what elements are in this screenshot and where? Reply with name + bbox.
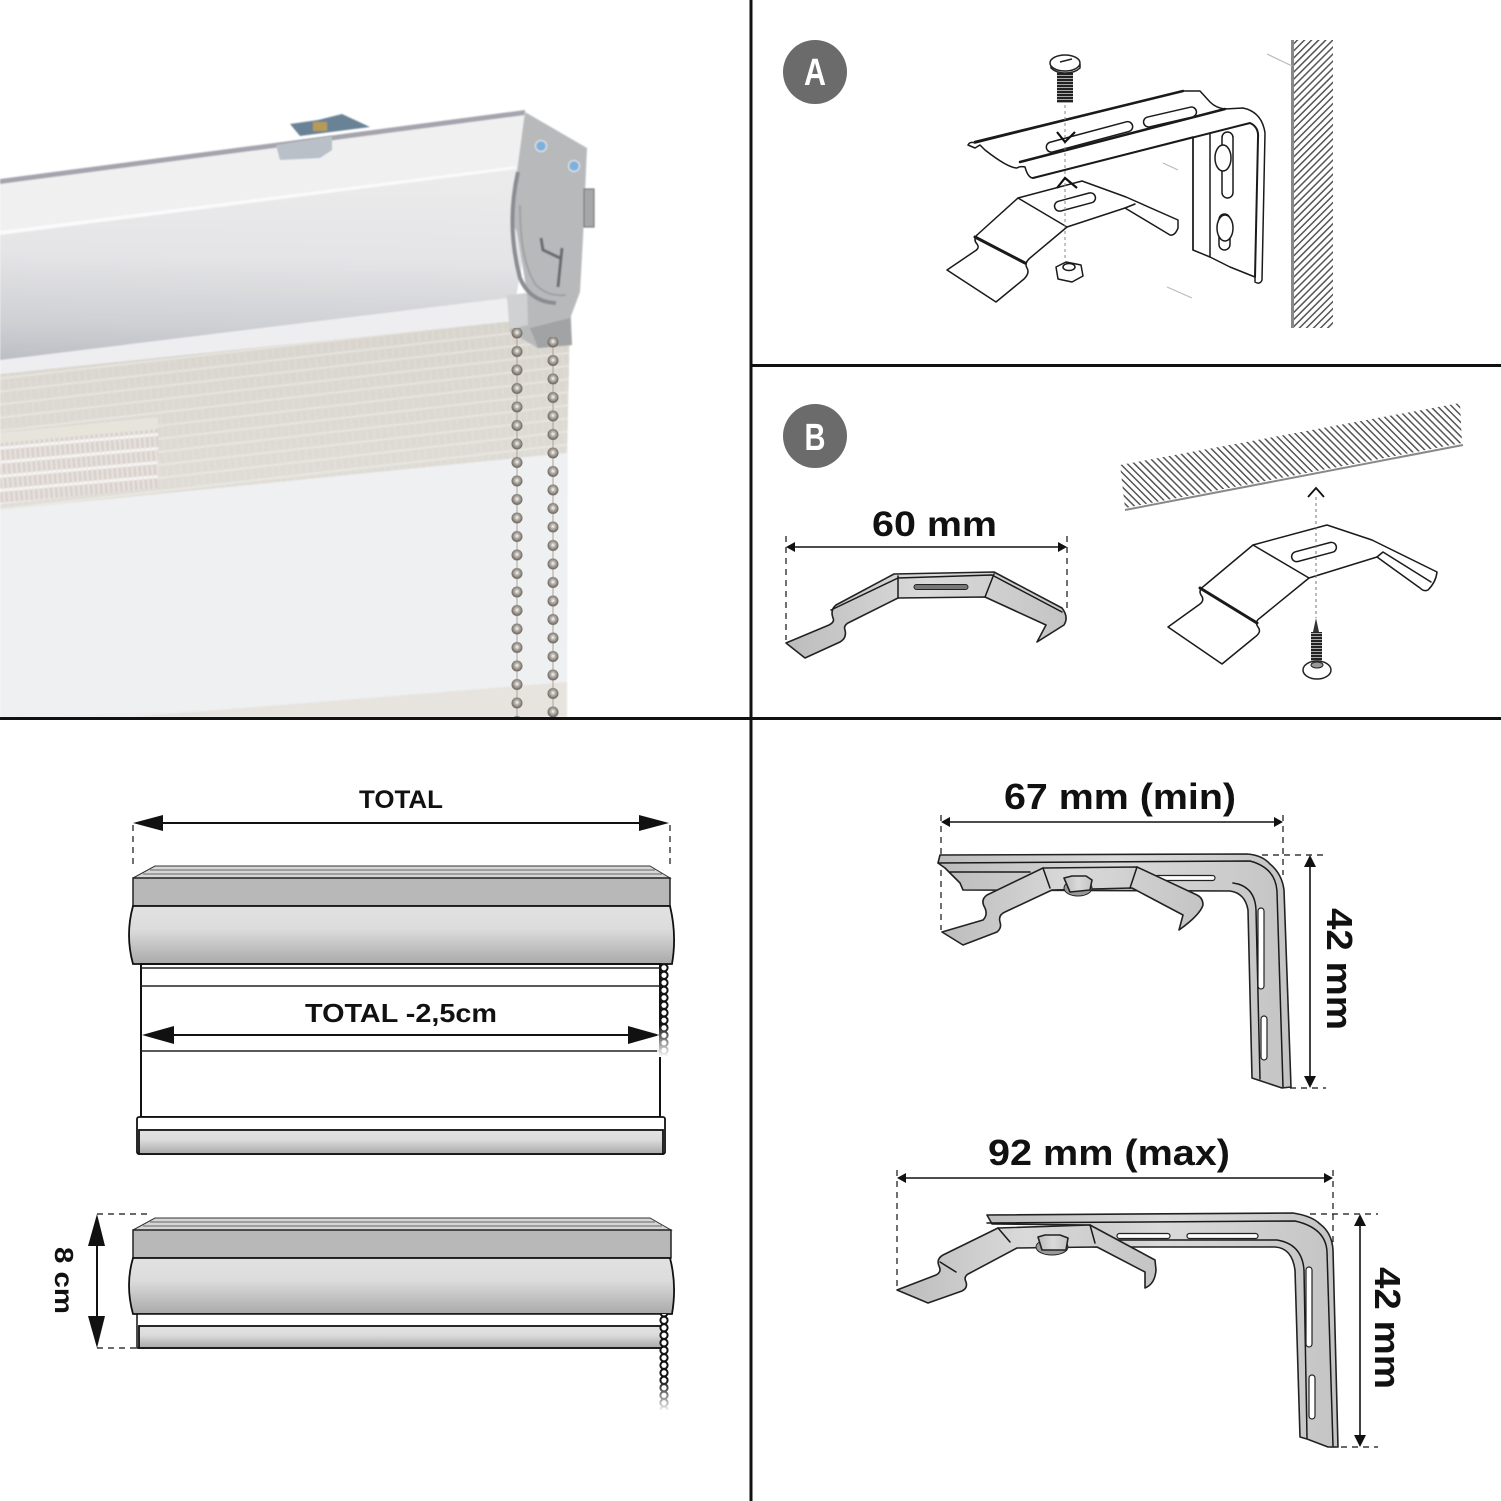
- chain: [657, 964, 671, 1057]
- fabric panel: [0, 295, 570, 717]
- panel: 92 mm maximum bracket: [897, 1132, 1408, 1447]
- headrail top: [133, 866, 670, 906]
- width dimension: [897, 1132, 1333, 1290]
- width dimension: 92 mm (max): [988, 1132, 1230, 1173]
- cylinder: [129, 1258, 674, 1314]
- TOTAL dimension: TOTAL: [359, 786, 443, 814]
- clip, front view: [786, 572, 1066, 658]
- clip: [942, 867, 1203, 945]
- chain: [657, 1314, 671, 1412]
- height dimension: 42 mm: [1367, 1267, 1408, 1389]
- clip plate: [947, 181, 1178, 302]
- headrail body: [0, 110, 528, 360]
- height dimension: 42 mm: [1319, 908, 1360, 1030]
- cassette cylinder: [129, 906, 674, 964]
- panel: height diagram: [49, 1214, 674, 1412]
- clip, ceiling view: [1168, 525, 1437, 664]
- fabric: [141, 964, 660, 1117]
- clip: [897, 1225, 1156, 1303]
- 8 cm dimension: 8 cm: [49, 1247, 79, 1314]
- panel A: wall bracket assembly: [783, 40, 1333, 328]
- bracket: [938, 854, 1291, 1088]
- panel: 67 mm minimum bracket: [938, 776, 1360, 1088]
- TOTAL -2,5cm dimension: TOTAL -2,5cm: [305, 998, 497, 1028]
- mounting clip on rail: [276, 114, 370, 160]
- TOTAL dimension: [133, 786, 670, 866]
- screw with arrow: [1303, 488, 1331, 679]
- TOTAL -2,5cm dimension: [142, 998, 660, 1044]
- 8 cm dimension: [49, 1214, 147, 1348]
- width dimension: [941, 776, 1283, 930]
- badge A: A: [804, 52, 826, 94]
- panel: total width diagram: [129, 786, 674, 1154]
- ceiling hatching: [1120, 403, 1463, 510]
- bottom bar: [137, 1117, 665, 1154]
- wall hatching: [1163, 40, 1333, 328]
- 60 mm dimension: [786, 505, 1067, 640]
- height dimension: [1262, 855, 1360, 1088]
- photo: roller blind headrail: [0, 110, 594, 717]
- height dimension: [1310, 1214, 1408, 1447]
- badge A: [783, 40, 847, 104]
- assembly arrows: [1057, 105, 1077, 260]
- bottom bar: [137, 1314, 664, 1348]
- end cap: [507, 112, 594, 348]
- panel B: ceiling mount: [783, 403, 1463, 679]
- badge B: [783, 404, 847, 468]
- L bracket: [968, 91, 1265, 283]
- badge B: B: [804, 417, 826, 459]
- bead chains: [510, 328, 560, 717]
- width dimension: 67 mm (min): [1004, 776, 1236, 817]
- nut: [1056, 262, 1083, 282]
- bolt: [1050, 55, 1080, 103]
- 60 mm dimension: 60 mm: [872, 505, 997, 544]
- rail top: [133, 1218, 671, 1258]
- bracket: [987, 1213, 1338, 1447]
